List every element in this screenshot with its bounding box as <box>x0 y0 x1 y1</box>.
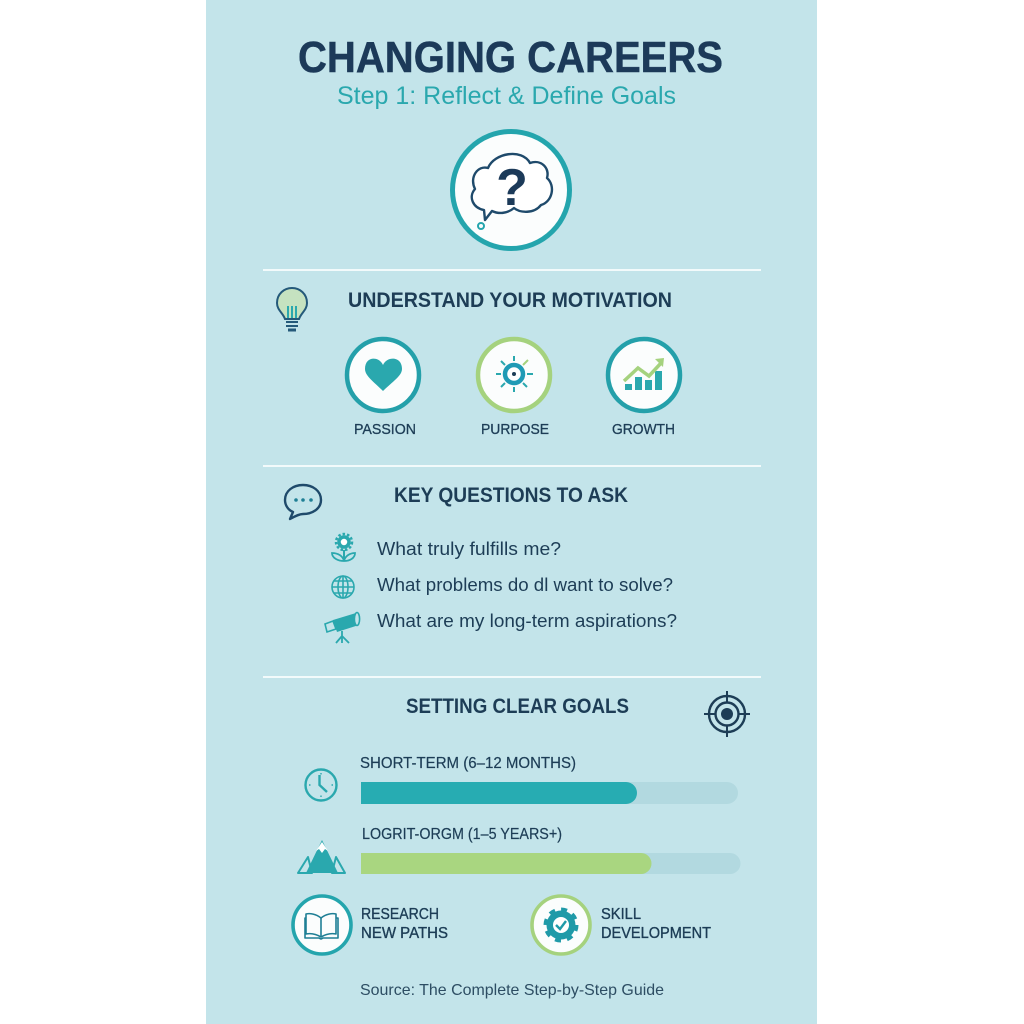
icon: passion heart <box>347 339 419 411</box>
icon: speech bubble <box>285 485 321 519</box>
icon: open book <box>293 896 351 954</box>
label: short-term: SHORT-TERM (6–12 MONTHS) <box>360 755 576 772</box>
icon: telescope <box>325 612 360 643</box>
title: CHANGING CAREERS <box>298 33 723 82</box>
icon: purpose sun eye <box>478 339 550 411</box>
icon: gear with check <box>532 896 590 954</box>
icon: mountain <box>298 840 345 873</box>
progress bar: long-term <box>361 853 740 874</box>
question 2: What problems do dl want to solve? <box>377 575 673 595</box>
question 3: What are my long-term aspirations? <box>377 611 677 631</box>
question 1: What truly fulfills me? <box>377 539 561 559</box>
text: skill development: DEVELOPMENT <box>601 925 711 942</box>
subtitle: Step 1: Reflect & Define Goals <box>337 82 676 110</box>
icon: light bulb <box>277 288 307 330</box>
progress bar: short-term <box>361 782 738 804</box>
label: passion: PASSION <box>354 421 416 438</box>
icon: thought cloud with question mark: ? <box>496 159 528 217</box>
icon: target <box>704 691 750 737</box>
icon: flower <box>332 534 355 561</box>
heading: key questions to ask: KEY QUESTIONS TO ASK <box>394 484 628 507</box>
section: key questions to ask <box>285 484 677 643</box>
callout: skill development <box>532 896 711 954</box>
panel: infographic background <box>206 0 817 1024</box>
label: growth: GROWTH <box>612 421 675 438</box>
label: long-term: LOGRIT-ORGM (1–5 YEARS+) <box>362 826 562 843</box>
section: understand your motivation <box>277 288 680 438</box>
heading: setting clear goals: SETTING CLEAR GOALS <box>406 695 629 718</box>
callout: research new paths <box>293 896 448 954</box>
icon: globe <box>332 576 354 598</box>
section: setting clear goals <box>298 691 750 874</box>
heading: understand your motivation: UNDERSTAND YOUR MOTIVATION <box>348 289 672 312</box>
icon: clock <box>306 770 336 800</box>
label: purpose: PURPOSE <box>481 421 549 438</box>
text: skill development: SKILL <box>601 906 641 923</box>
source note: Source: The Complete Step-by-Step Guide <box>360 982 664 999</box>
icon: thought cloud with question mark <box>452 132 570 248</box>
text: research new paths: NEW PATHS <box>361 925 448 942</box>
icon: growth chart <box>608 339 680 411</box>
text: research new paths: RESEARCH <box>361 906 439 923</box>
